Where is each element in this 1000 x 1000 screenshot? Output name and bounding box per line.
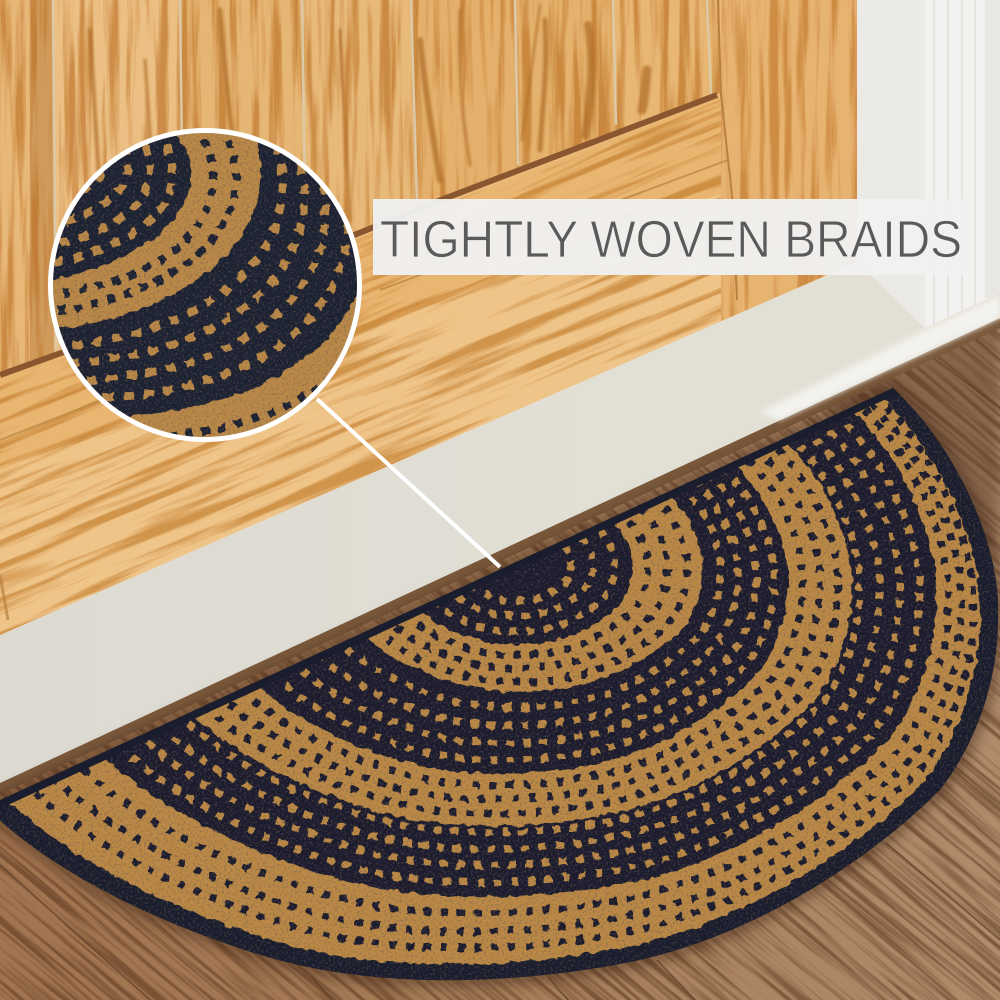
rug straight edge bbox=[0, 386, 900, 809]
band: navy centre bbox=[417, 518, 633, 644]
magnified rug detail circle bbox=[48, 128, 362, 442]
zoom: tan band bbox=[45, 125, 261, 330]
rug outer rim bbox=[0, 388, 998, 980]
baseboard bbox=[0, 262, 1000, 783]
zoom: stitches bbox=[53, 139, 350, 437]
door planks bbox=[0, 0, 720, 400]
band: tan ring 2 bbox=[190, 439, 852, 826]
band: navy ring 1 bbox=[101, 408, 936, 897]
zoom: white ring bbox=[50, 130, 360, 440]
zoom: fibre speckle bbox=[50, 130, 360, 440]
band: navy ring 2 bbox=[255, 462, 788, 774]
lower door rail bbox=[0, 97, 721, 635]
floor bbox=[0, 318, 1000, 1000]
rug bbox=[0, 380, 1000, 990]
band: outer tan bbox=[6, 395, 980, 964]
braid stitches bbox=[29, 396, 973, 948]
band: tan ring 3 bbox=[362, 493, 702, 692]
plank streaks bbox=[87, 3, 652, 222]
label: tightly woven braids: TIGHTLY WOVEN BRAIDS bbox=[380, 211, 962, 269]
rug fibre speckle bbox=[0, 380, 1000, 990]
rail groove bbox=[0, 95, 717, 375]
callout pointer line bbox=[317, 399, 500, 567]
zoom: lower tan band bbox=[128, 296, 356, 437]
wall and trim bbox=[857, 0, 1000, 328]
wooden door bbox=[0, 0, 922, 640]
rug shadow bbox=[0, 388, 998, 980]
door right stile bbox=[721, 0, 857, 330]
